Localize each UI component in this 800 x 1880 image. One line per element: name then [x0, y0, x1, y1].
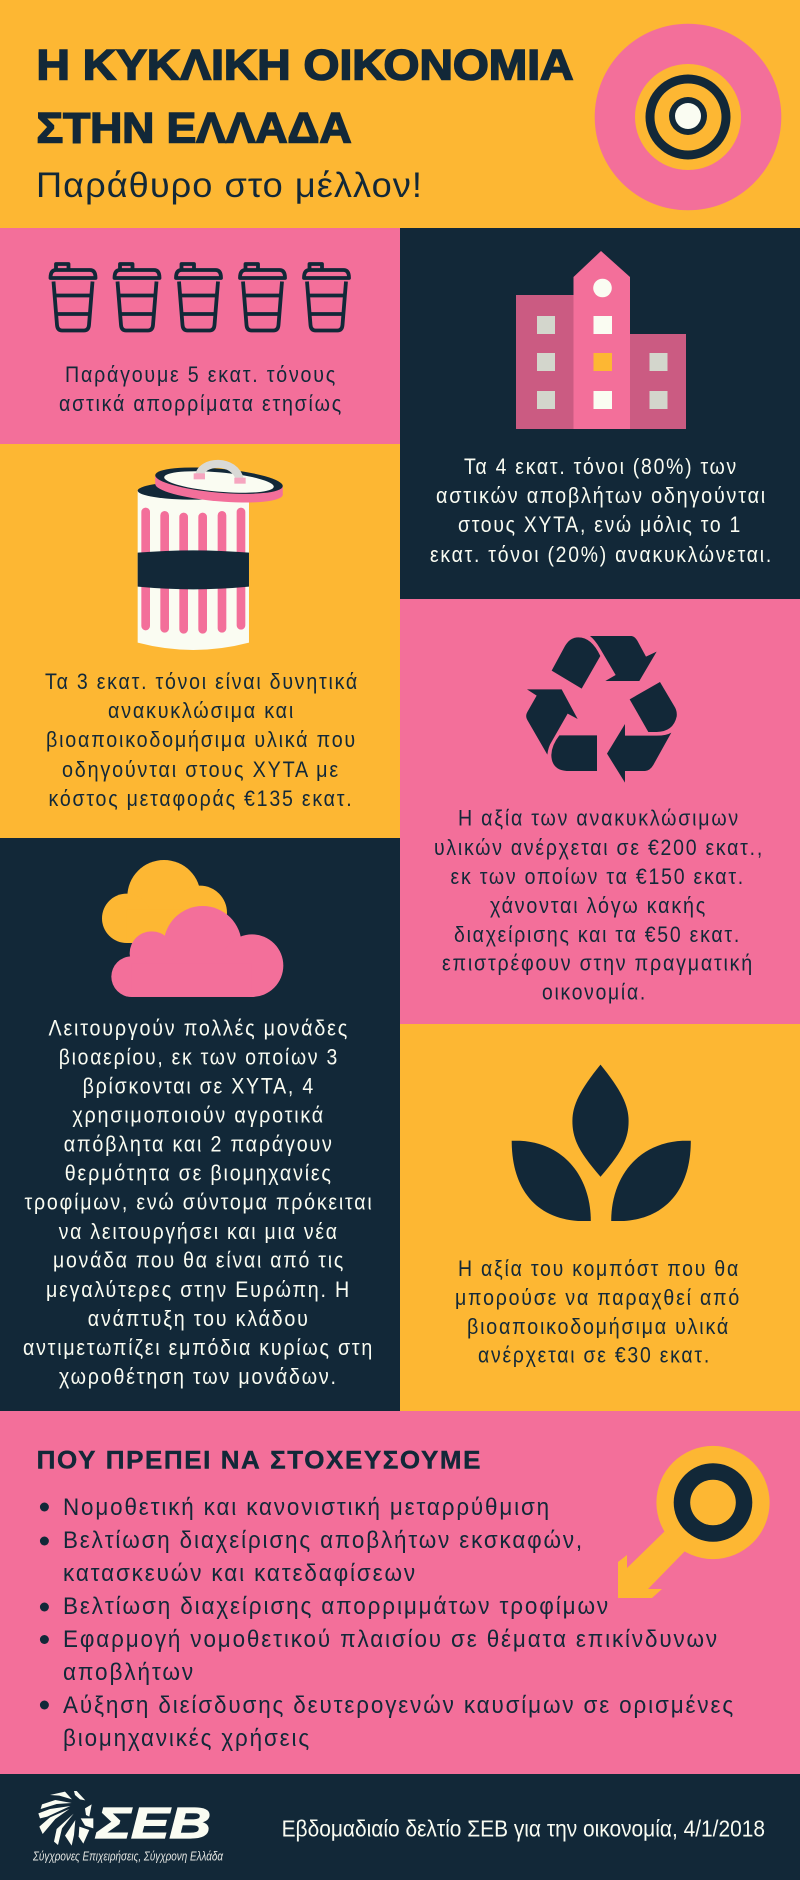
text: biogas units: αντιμετωπίζει εμπόδια κυρίως στη — [23, 1335, 374, 1360]
tagline: Σύγχρονες Επιχειρήσεις, Σύγχρονη Ελλάδα — [32, 1849, 223, 1864]
text: value of recyclables: οικονομία. — [542, 980, 647, 1004]
text: bulletin date: Εβδομαδιαίο δελτίο ΣΕΒ για την οικονομία, 4/1/2018 — [282, 1816, 765, 1842]
text: value of recyclables: εκ των οποίων τα €150 εκατ. — [450, 864, 745, 889]
panel: compost — [400, 1024, 800, 1411]
panel: municipal waste generated — [0, 228, 400, 444]
text: landfill and recycling: στους ΧΥΤΑ, ενώ μόλις το 1 — [458, 512, 742, 537]
icon: recycling symbol — [526, 636, 677, 783]
panel: recyclable materials — [0, 444, 400, 838]
text: biogas units — [23, 1015, 374, 1389]
text: recyclable tonnes: οδηγούνται στους ΧΥΤΑ με — [62, 757, 340, 782]
panel: value of recyclables — [400, 599, 800, 1024]
panel: biogas — [0, 838, 400, 1411]
text: five million tonnes: αστικά απορρίματα ετησίως — [59, 391, 343, 416]
text: biogas units: θερμότητα σε βιομηχανίες — [65, 1161, 333, 1186]
text: biogas units: βρίσκονται σε ΧΥΤΑ, 4 — [83, 1073, 315, 1098]
bullet list: βιομηχανικές χρήσεις — [63, 1725, 311, 1752]
text: biogas units: χωροθέτηση των μονάδων. — [59, 1364, 338, 1389]
subtitle: Παράθυρο στο μέλλον! — [36, 166, 423, 205]
icon: building — [516, 251, 686, 429]
text: biogas units: απόβλητα και 2 παράγουν — [64, 1132, 334, 1156]
bullet list: Βελτίωση διαχείρισης απορριμμάτων τροφίμων — [63, 1593, 610, 1620]
text: landfill and recycling: Τα 4 εκατ. τόνοι (80%) των — [464, 454, 738, 479]
icon: target circle — [595, 24, 781, 210]
title: ΣΤΗΝ ΕΛΛΑΔΑ — [36, 104, 352, 152]
text: compost value: Η αξία του κομπόστ που θα — [458, 1256, 740, 1281]
text: value of recyclables: υλικών ανέρχεται σε €200 εκατ., — [434, 835, 764, 860]
bullet list — [40, 1494, 735, 1752]
text: five million tonnes: Παράγουμε 5 εκατ. τόνους — [65, 362, 337, 387]
text: biogas units: τροφίμων, ενώ σύντομα πρόκειται — [24, 1190, 374, 1215]
text: landfill and recycling — [430, 454, 773, 567]
icon: target with arrow — [618, 1446, 770, 1598]
heading: where to target: ΠΟΥ ΠΡΕΠΕΙ ΝΑ ΣΤΟΧΕΥΣΟΥΜΕ — [37, 1447, 482, 1475]
text: biogas units: να λειτουργήσει και μια νέα — [59, 1219, 339, 1244]
bullet list: Αύξηση διείσδυσης δευτερογενών καυσίμων σε ορισμένες — [63, 1692, 735, 1719]
icon: starburst — [38, 1791, 93, 1846]
panel: footer — [0, 1774, 800, 1880]
text: biogas units: ανάπτυξη του κλάδου — [88, 1306, 310, 1331]
wordmark: SEV: ΣΕΒ — [94, 1799, 211, 1848]
text: biogas units: μονάδα που θα είναι από τις — [53, 1248, 345, 1273]
text: recyclable tonnes: βιοαποικοδομήσιμα υλικά που — [46, 727, 357, 752]
text: value of recyclables: Η αξία των ανακυκλώσιμων — [458, 806, 740, 831]
icon: trash can — [138, 463, 284, 650]
text: recyclable tonnes: ανακυκλώσιμα και — [108, 698, 295, 723]
text: compost value: ανέρχεται σε €30 εκατ. — [478, 1343, 711, 1368]
panel: where to target — [0, 1411, 800, 1774]
panel: header — [0, 0, 800, 228]
text: compost value — [455, 1256, 741, 1368]
text: compost value: μπορούσε να παραχθεί από — [455, 1285, 741, 1310]
text: five million tonnes — [59, 362, 343, 416]
text: biogas units: Λειτουργούν πολλές μονάδες — [48, 1015, 349, 1040]
text: landfill and recycling: αστικών αποβλήτων οδηγούνται — [436, 483, 767, 508]
text: biogas units: μεγαλύτερες στην Ευρώπη. Η — [46, 1277, 351, 1302]
bullet list: αποβλήτων — [63, 1659, 195, 1686]
title — [36, 42, 574, 152]
text: value of recyclables — [434, 806, 764, 1004]
text: biogas units: βιοαερίου, εκ των οποίων 3 — [59, 1044, 339, 1069]
bullet list: Βελτίωση διαχείρισης αποβλήτων εκσκαφών, — [63, 1527, 584, 1554]
panel: landfill share — [400, 228, 800, 599]
icon: five cups — [50, 264, 349, 330]
bullet list: Νομοθετική και κανονιστική μεταρρύθμιση — [63, 1494, 551, 1521]
text: value of recyclables: χάνονται λόγω κακής — [490, 893, 707, 918]
text: compost value: βιοαποικοδομήσιμα υλικά — [467, 1314, 730, 1339]
text: value of recyclables: επιστρέφουν στην πραγματική — [442, 950, 754, 976]
text: recyclable tonnes: Τα 3 εκατ. τόνοι είναι δυνητικά — [45, 669, 359, 694]
text: recyclable tonnes — [45, 669, 359, 811]
logo: SEV — [32, 1791, 223, 1864]
text: value of recyclables: διαχείρισης και τα €50 εκατ. — [454, 922, 741, 947]
icon: plant leaves — [512, 1065, 691, 1221]
text: recyclable tonnes: κόστος μεταφοράς €135 εκατ. — [48, 786, 354, 811]
bullet list: Εφαρμογή νομοθετικού πλαισίου σε θέματα επικίνδυνων — [63, 1626, 719, 1653]
text: biogas units: χρησιμοποιούν αγροτικά — [72, 1103, 325, 1128]
title: Η ΚΥΚΛΙΚΗ ΟΙΚΟΝΟΜΙΑ — [36, 42, 574, 90]
icon: clouds — [102, 860, 283, 997]
bullet list: κατασκευών και κατεδαφίσεων — [63, 1560, 417, 1587]
